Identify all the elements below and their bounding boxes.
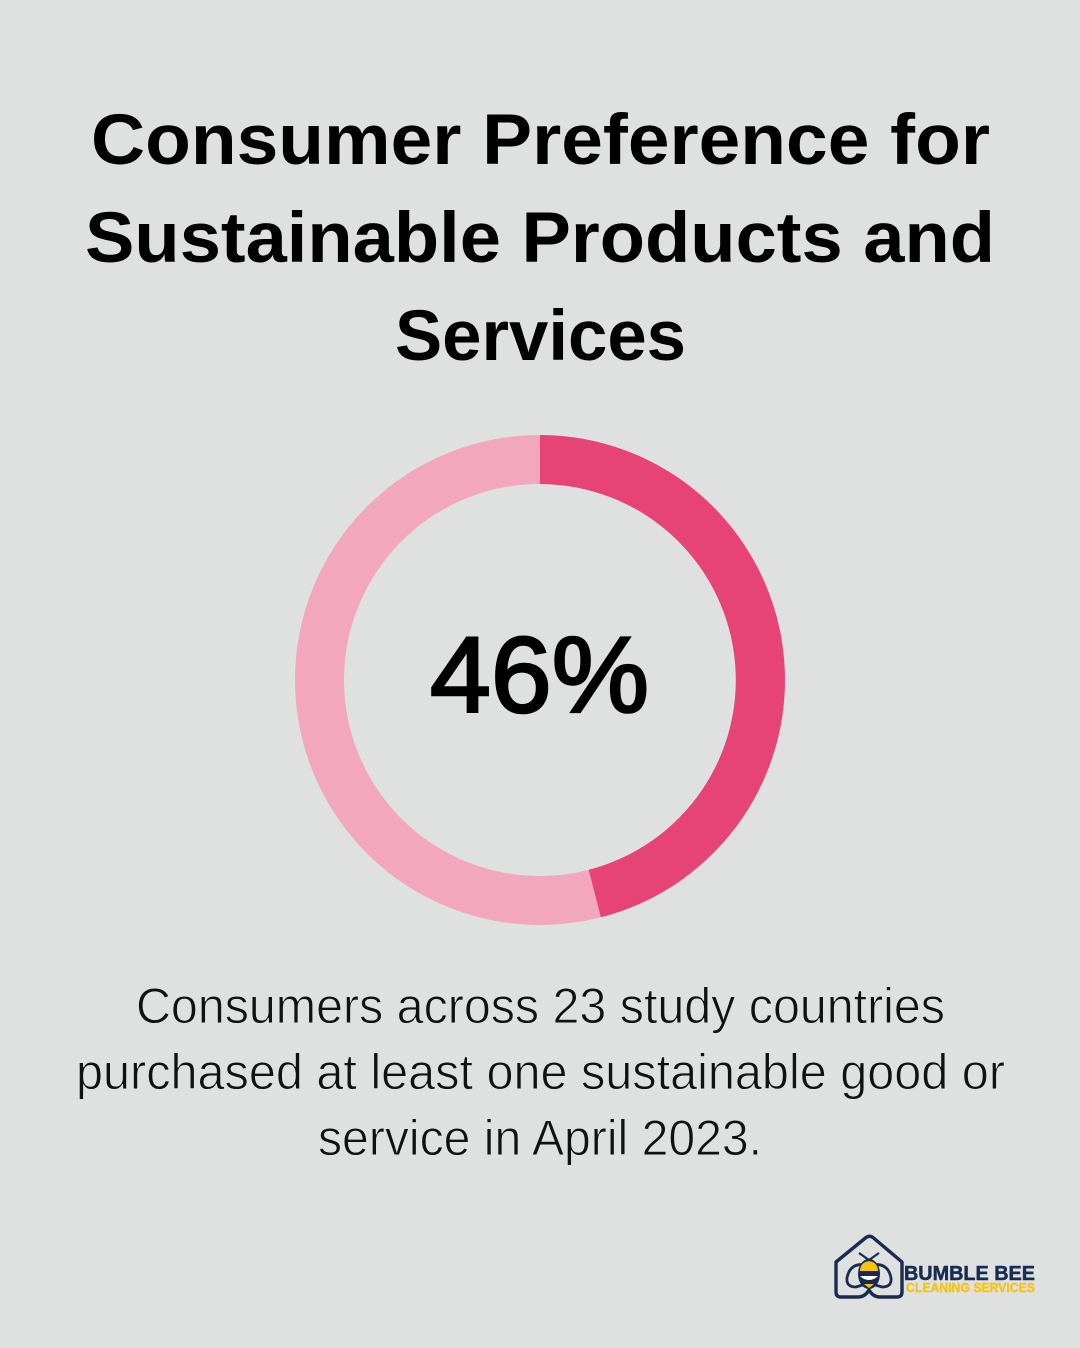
description text: Consumers across 23 study countries [136, 978, 945, 1034]
logo wordmark: BUMBLE BEE [904, 1263, 1035, 1285]
description text: purchased at least one sustainable good or [76, 1044, 1005, 1100]
title: Services [395, 297, 686, 376]
description text [76, 978, 1005, 1166]
donut chart: 46% [320, 435, 785, 917]
logo: Bumble Bee Cleaning Services [836, 1236, 1035, 1297]
title: Consumer Preference for [91, 101, 990, 180]
title: Sustainable Products and [85, 199, 995, 278]
title [85, 101, 995, 376]
icon: house with bee [836, 1236, 902, 1297]
description text: service in April 2023. [318, 1110, 762, 1166]
logo tagline: CLEANING SERVICES [906, 1281, 1035, 1295]
percentage value: 46% [430, 614, 649, 735]
